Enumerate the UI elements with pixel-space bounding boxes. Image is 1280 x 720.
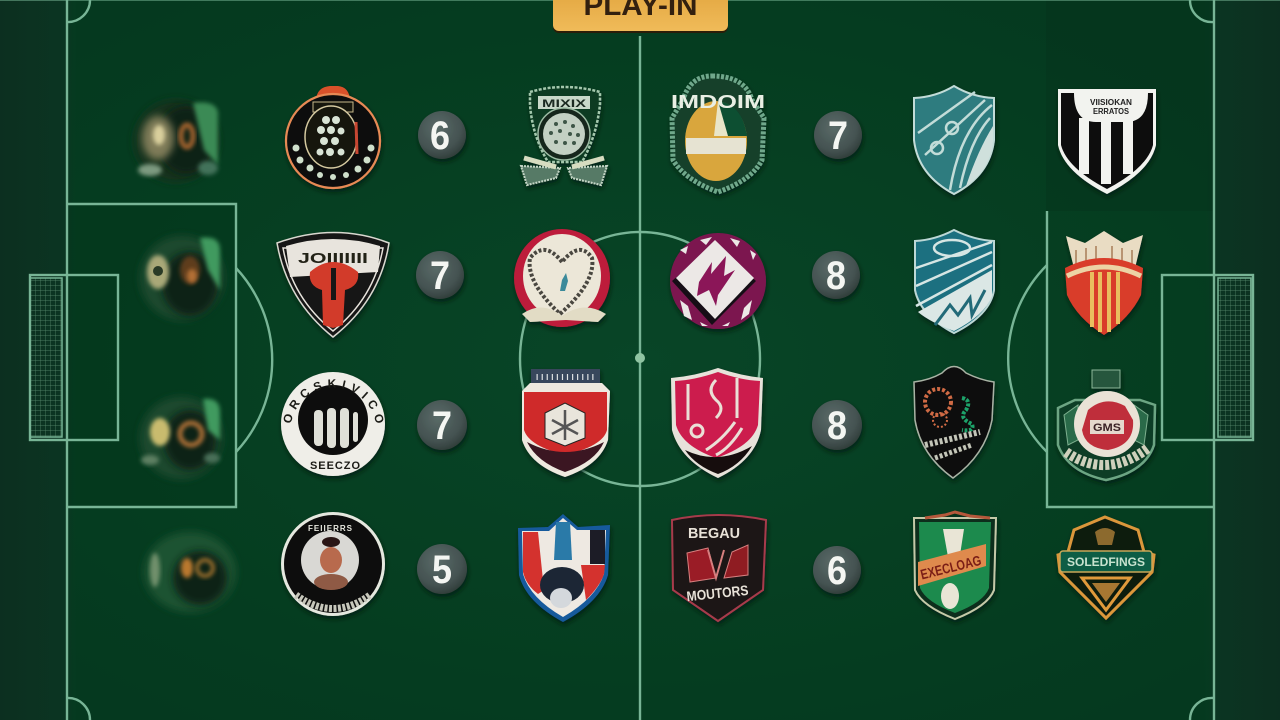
team badge row 4 col 3: black and red hexagonal shield (672, 515, 766, 621)
score: 6 (813, 546, 861, 594)
score: 7: 7 (432, 404, 452, 448)
team badge row 4 col 3: black and red hexagonal shield: MOUTORS (686, 582, 749, 604)
score: 8 (812, 251, 860, 299)
team badge row 1 col 2: green dotted crest (521, 87, 607, 185)
team badge row 3 col 5: green and red round crest: GMS (1093, 422, 1121, 434)
heading: play-in tab (553, 0, 728, 33)
score: 6: 6 (827, 549, 847, 593)
team badge row 3 col 4: black shield with orange and green (914, 366, 994, 478)
player photo 2 (140, 236, 224, 320)
team badge row 1 col 3: gold and green oval crest: IMDOIM (671, 92, 765, 112)
score: 5: 5 (432, 548, 452, 592)
score: 7 (417, 400, 467, 450)
team badge row 1 col 5: black and white striped shield: VIISIOKAN (1090, 98, 1132, 107)
team badge row 4 col 1: round portrait seal (281, 512, 385, 616)
score: 5 (417, 544, 467, 594)
score: 6 (418, 111, 466, 159)
team badge row 4 col 4: green and orange shield (914, 512, 996, 619)
team badge row 3 col 3: crimson shield (671, 368, 763, 478)
team badge row 4 col 3: black and red hexagonal shield: BEGAU (688, 525, 740, 542)
player photo 1 (134, 100, 218, 182)
team badge row 4 col 1: round portrait seal: FEIIERRS (308, 524, 353, 533)
score: 8 (812, 400, 862, 450)
team badge row 3 col 5: green and red round crest (1058, 370, 1155, 480)
team badge row 1 col 5: black and white striped shield: ERRATOS (1093, 107, 1130, 116)
team badge row 4 col 2: red white blue shield (518, 514, 610, 622)
team badge row 1 col 3: gold and green oval crest (671, 76, 765, 192)
team badge row 4 col 4: green and orange shield: EXECLOAG (919, 552, 983, 582)
team badge row 4 col 5: orange and green crest: SOLEDFINGS (1067, 555, 1145, 569)
score: 6: 6 (430, 114, 450, 158)
team badge row 3 col 2: red shield with dark banner: IIIIIIIIIIII (536, 373, 594, 382)
team badge row 1 col 4: teal striped shield (914, 86, 994, 194)
team badge row 2 col 1: black and red shield: JOIIIIIII (298, 250, 368, 267)
score: 8: 8 (826, 254, 846, 298)
team badge row 1 col 1: round black and orange crest (286, 86, 380, 188)
team badge row 3 col 1: white round seal (280, 372, 388, 481)
team badge row 2 col 3: purple diamond crest (670, 233, 766, 329)
team badge row 3 col 1: white round seal: ORCSKIVICO (284, 379, 384, 423)
team badge row 3 col 1: white round seal: SEECZO (310, 460, 360, 472)
player photo 3 (140, 397, 222, 479)
team badge row 2 col 2: red and cream round crest (514, 229, 610, 327)
team badge row 1 col 5: black and white striped shield (1058, 89, 1156, 194)
team badge row 4 col 5: orange and green crest (1058, 517, 1154, 618)
team badge row 3 col 2: red shield with dark banner (522, 369, 610, 477)
team badge row 2 col 4: teal diagonal shield (915, 230, 994, 333)
score: 7 (814, 111, 862, 159)
team badge row 1 col 2: green dotted crest: MIXIX (542, 98, 587, 110)
score: 7: 7 (828, 114, 848, 158)
score: 7 (416, 251, 464, 299)
team badge row 2 col 5: red and cream crown crest (1065, 231, 1143, 335)
team badge row 2 col 1: black and red shield (277, 232, 389, 337)
score: 7: 7 (430, 254, 450, 298)
player photo 4 (144, 532, 236, 612)
score: 8: 8 (827, 404, 847, 448)
